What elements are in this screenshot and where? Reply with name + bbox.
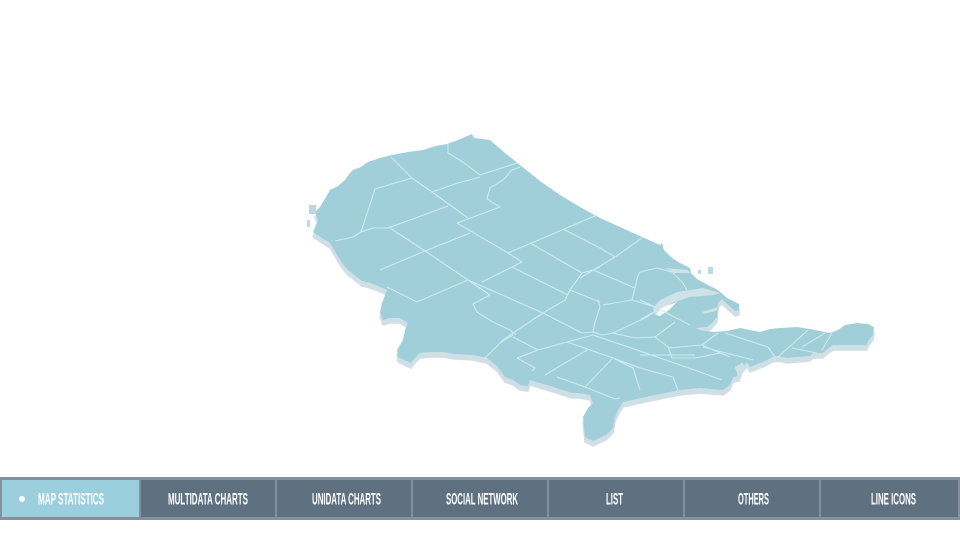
tab: social network: SOCIAL NETWORK xyxy=(446,490,518,508)
tab: unidata charts: UNIDATA CHARTS xyxy=(312,490,381,508)
map top surface xyxy=(313,134,874,441)
tab: multidata charts xyxy=(141,480,275,517)
tab: others: OTHERS xyxy=(738,490,769,508)
tab: map statistics (active) xyxy=(2,480,139,517)
tab: list xyxy=(549,480,683,517)
tab: social network xyxy=(413,480,547,517)
map extrusion shadow xyxy=(313,139,874,446)
state borders xyxy=(335,144,832,399)
tab: list: LIST xyxy=(606,490,623,508)
islands xyxy=(307,205,713,274)
bar frame xyxy=(0,477,960,520)
tab: map statistics (active): MAP STATISTICS xyxy=(38,490,104,508)
tab: others xyxy=(685,480,819,517)
navigation bar xyxy=(0,477,960,520)
great lakes and bays xyxy=(653,268,745,377)
tab: line icons xyxy=(821,480,958,517)
tab: unidata charts xyxy=(277,480,411,517)
tab: multidata charts: MULTIDATA CHARTS xyxy=(168,490,248,508)
map: isometric United States xyxy=(307,134,874,446)
lake michigan open water xyxy=(656,302,677,316)
